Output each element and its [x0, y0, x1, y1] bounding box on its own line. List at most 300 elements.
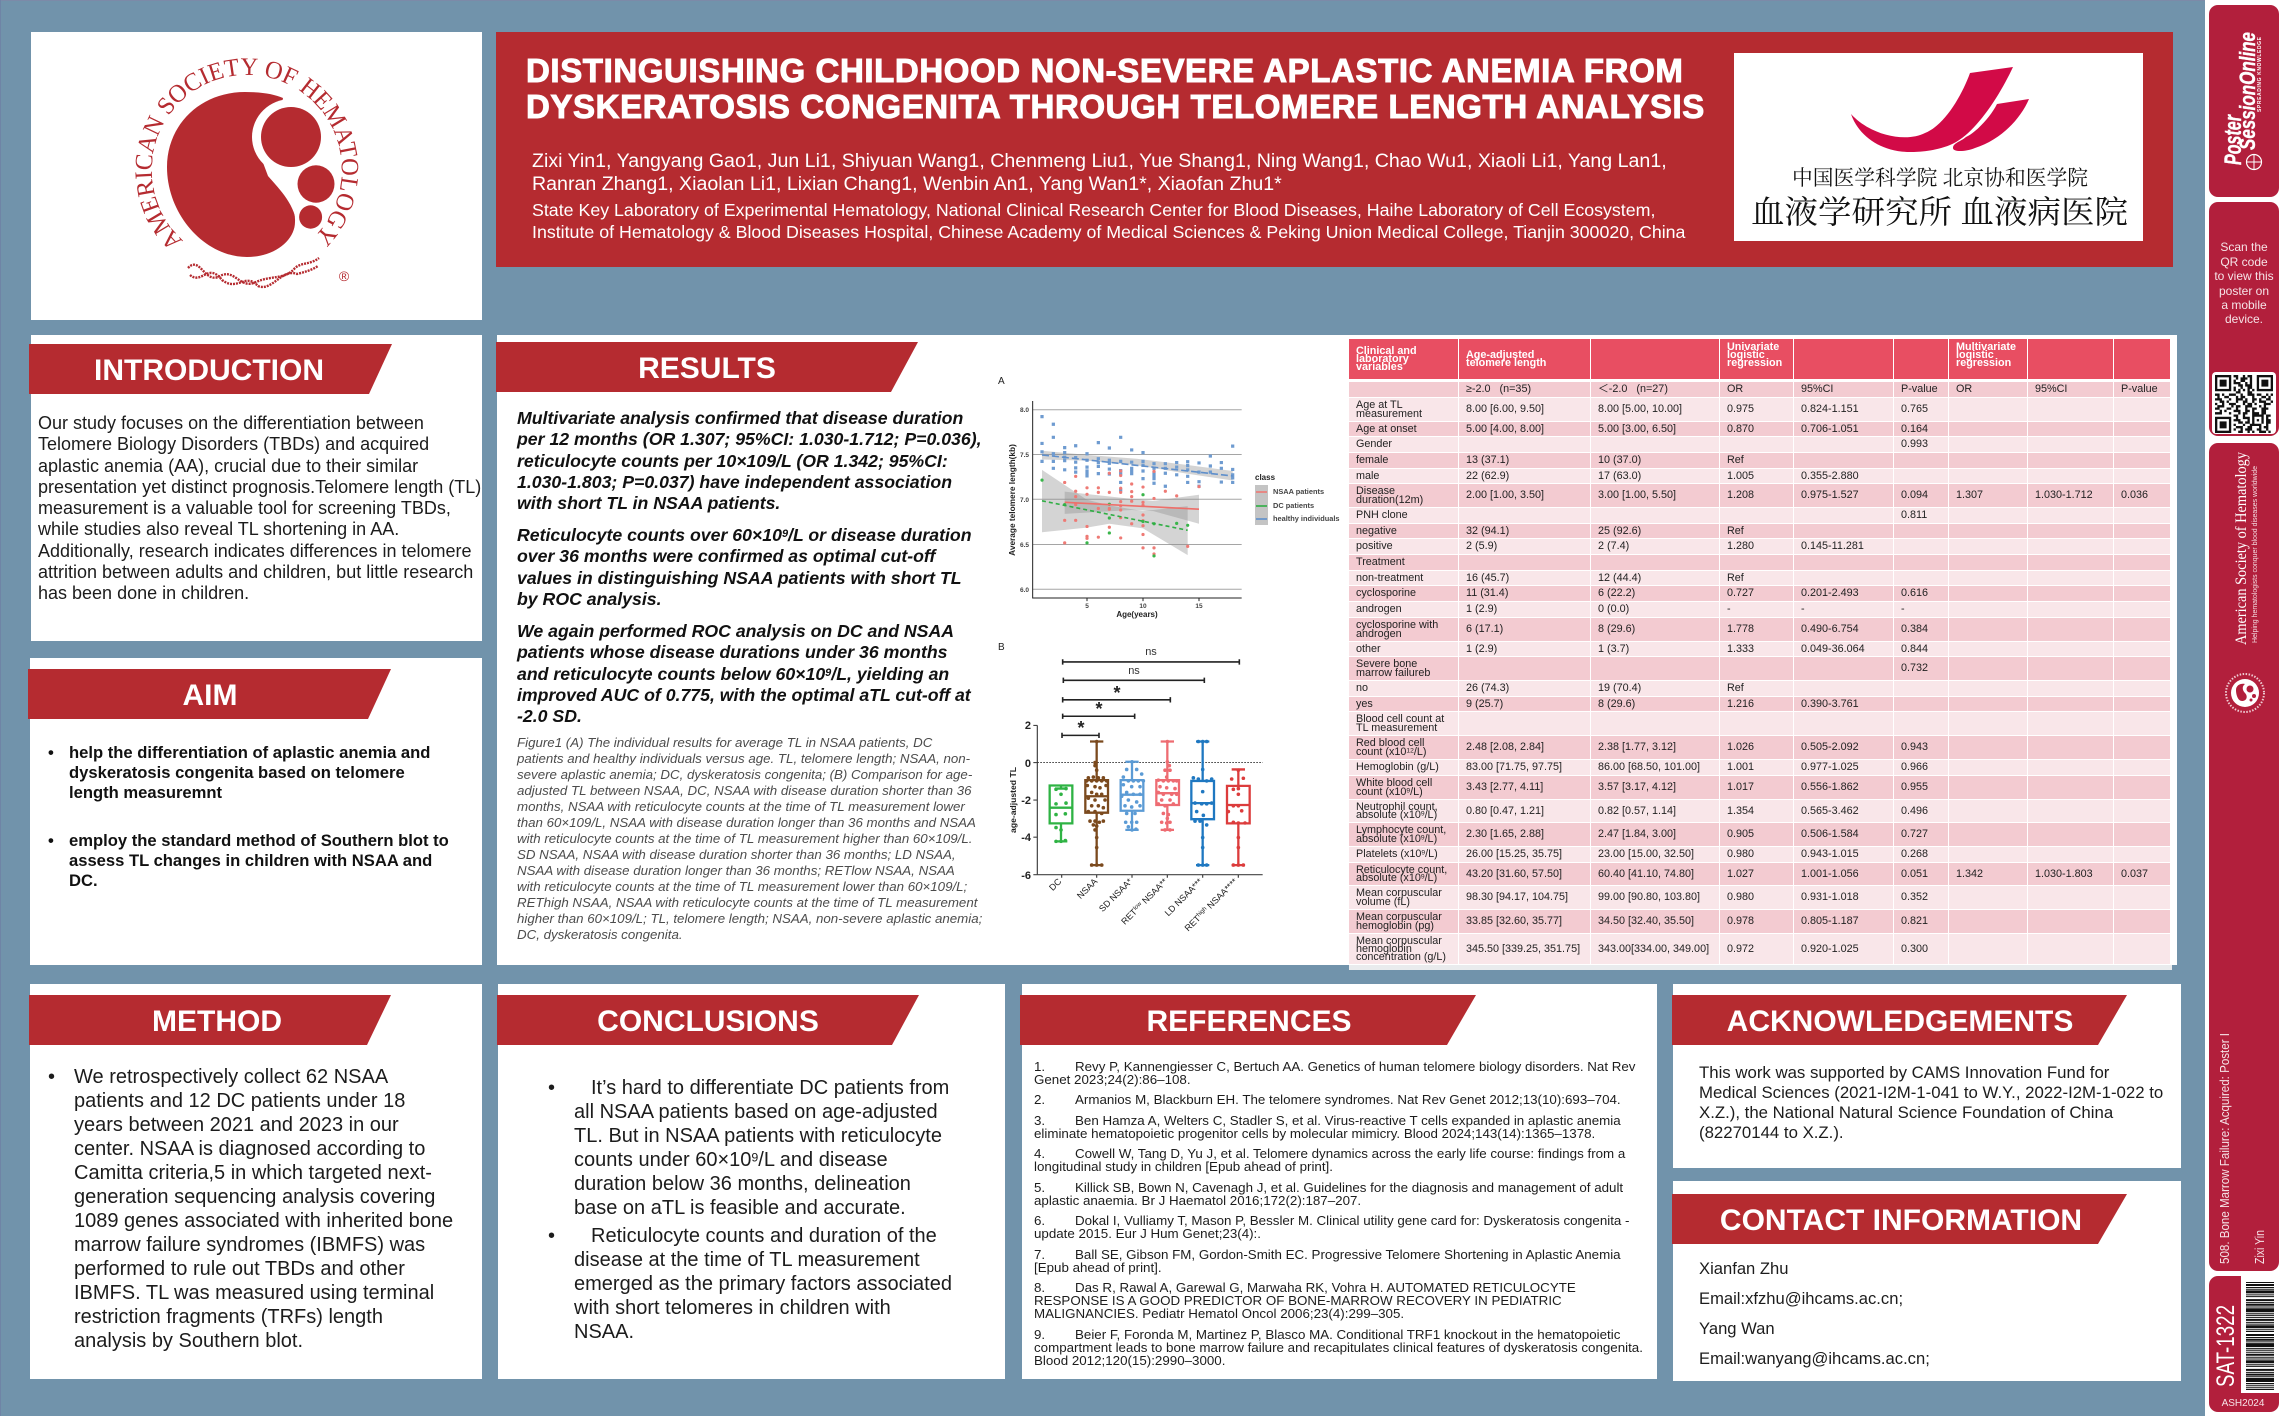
introduction text — [38, 413, 481, 603]
poster title: DYSKERATOSIS CONGENITA THROUGH TELOMERE LENGTH ANALYSIS — [526, 88, 1705, 125]
table: logistic regression: 6 (22.2) — [1598, 587, 1635, 599]
institution logo — [1734, 53, 2143, 241]
results finding 1: per 12 months (OR 1.307; 95%CI: 1.030-1.712; P=0.036), — [517, 429, 982, 449]
heading: contact information — [1672, 1194, 2127, 1244]
sidebar: QR code prompt: poster on — [2219, 284, 2269, 298]
table: logistic regression: 13 (37.1) — [1466, 454, 1509, 466]
table: logistic regression: 98.30 [94.17, 104.75] — [1466, 891, 1568, 903]
introduction text: Our study focuses on the differentiation between — [38, 413, 424, 433]
panel: aim — [30, 658, 482, 965]
conclusion bullet 1: TL. But in NSAA patients with reticulocyte — [574, 1125, 942, 1147]
heading: references: REFERENCES — [1146, 1005, 1352, 1038]
sidebar: poster number and barcode: ASH2024 — [2222, 1398, 2265, 1409]
sidebar: PosterSessionOnline logo: Poster — [2220, 114, 2247, 165]
table: logistic regression: 1.001-1.056 — [1801, 868, 1859, 880]
acknowledgements text: Medical Sciences (2021-I2M-1-041 to W.Y., 2022-I2M-1-022 to — [1699, 1083, 2163, 1102]
table: logistic regression: 1.354 — [1727, 805, 1754, 817]
table: logistic regression: P-value — [2121, 383, 2158, 395]
conclusion bullet 1 — [548, 1077, 949, 1219]
reference 7: Ball SE, Gibson FM, Gordon-Smith EC. Progressive Telomere Shortening in Aplastic Anemia — [1075, 1247, 1621, 1262]
table: logistic regression: 0.805-1.187 — [1801, 915, 1859, 927]
table: logistic regression: 2.30 [1.65, 2.88] — [1466, 828, 1544, 840]
table: logistic regression: 99.00 [90.80, 103.80] — [1598, 891, 1700, 903]
table: logistic regression: non-treatment — [1356, 572, 1423, 584]
table: logistic regression: 0.905 — [1727, 828, 1754, 840]
table: logistic regression: 32 (94.1) — [1466, 525, 1509, 537]
table: logistic regression: 1.005 — [1727, 470, 1754, 482]
contact text: Email:xfzhu@ihcams.ac.cn; — [1699, 1289, 1903, 1308]
chart A: telomere length versus age scatter — [998, 376, 1242, 619]
table: logistic regression: OR — [1956, 383, 1972, 395]
table: logistic regression: concentration (g/L) — [1356, 951, 1446, 963]
table: logistic regression: White blood cell — [1356, 777, 1432, 789]
table: logistic regression: Hemoglobin (g/L) — [1356, 761, 1439, 773]
method bullet text: years between 2021 and 2023 in our — [74, 1114, 399, 1136]
table: logistic regression: 1.342 — [1956, 868, 1983, 880]
heading: introduction — [29, 344, 392, 394]
sidebar: poster number and barcode: SAT-1322 — [2212, 1305, 2240, 1387]
aim bullet 2: assess TL changes in children with NSAA and — [69, 851, 432, 870]
chart B: age-adjusted TL box plot: LD NSAA*** — [1163, 876, 1205, 918]
reference 6: Dokal I, Vulliamy T, Mason P, Bessler M. Clinical utility gene card for: Dyskeratosis congenita - — [1075, 1213, 1629, 1228]
chart A: telomere length versus age scatter: Average telomere length(kb) — [1007, 444, 1017, 556]
panel: method — [30, 984, 482, 1379]
chart B: age-adjusted TL box plot: ns — [1145, 646, 1157, 658]
figure caption: severe aplastic anemia; DC, dyskeratosis congenita; (B) Comparison for age- — [517, 767, 972, 782]
table: logistic regression: 0.355-2.880 — [1801, 470, 1859, 482]
sidebar: society and session panel — [2209, 443, 2279, 1271]
sidebar: society and session panel: American Society of Hematology — [2233, 452, 2250, 645]
table: logistic regression: 8 (29.6) — [1598, 698, 1635, 710]
chart B: age-adjusted TL box plot: * — [1095, 699, 1103, 719]
method bullet text: analysis by Southern blot. — [74, 1330, 303, 1352]
table: logistic regression: 0.980 — [1727, 848, 1754, 860]
results finding 2: values in distinguishing NSAA patients with short TL — [517, 568, 962, 588]
method bullet text: 1089 genes associated with inherited bone — [74, 1210, 453, 1232]
table: logistic regression: 0.036 — [2121, 489, 2148, 501]
table: logistic regression: 25 (92.6) — [1598, 525, 1641, 537]
heading: acknowledgements — [1672, 995, 2127, 1045]
table: logistic regression: 12 (44.4) — [1598, 572, 1641, 584]
method bullet text — [48, 1066, 453, 1352]
table: logistic regression: 0.980 — [1727, 891, 1754, 903]
table: logistic regression: count (x1012/L) — [1356, 746, 1426, 758]
table: logistic regression: 0.920-1.025 — [1801, 943, 1859, 955]
conclusion bullet 2 — [548, 1225, 952, 1343]
chart A legend — [1255, 473, 1340, 525]
table: logistic regression: 345.50 [339.25, 351.75] — [1466, 943, 1580, 955]
table: logistic regression: 43.20 [31.60, 57.50] — [1466, 868, 1562, 880]
figure caption: adjusted TL between NSAA, DC, NSAA with disease duration shorter than 36 — [517, 783, 972, 798]
table: logistic regression: 0.565-3.462 — [1801, 805, 1859, 817]
table: logistic regression: 26.00 [15.25, 35.75] — [1466, 848, 1562, 860]
sidebar: society and session panel: Zixi Yin — [2252, 1230, 2267, 1264]
chart B: age-adjusted TL box plot: NSAA — [1075, 876, 1099, 901]
table: logistic regression: 2 (7.4) — [1598, 540, 1629, 552]
conclusion bullet 1: counts under 60×109/L and disease — [574, 1149, 888, 1171]
heading: aim: AIM — [182, 679, 238, 712]
table: logistic regression: 1.333 — [1727, 643, 1754, 655]
authors: Ranran Zhang1, Xiaolan Li1, Lixian Chang1, Wenbin An1, Yang Wan1*, Xiaofan Zhu1* — [532, 173, 1282, 195]
affiliations: Institute of Hematology & Blood Diseases Hospital, Chinese Academy of Medical Sciences & Peking Union Medical College, Tianjin 300020, China — [532, 222, 1685, 242]
results finding 1 — [516, 408, 982, 513]
figure caption: DC, dyskeratosis congenita. — [517, 927, 683, 942]
table: logistic regression: cyclosporine — [1356, 587, 1416, 599]
table: logistic regression: 1.208 — [1727, 489, 1754, 501]
table: logistic regression: - — [1727, 603, 1731, 615]
table: logistic regression: Neutrophil count, — [1356, 801, 1438, 813]
table: logistic regression: Gender — [1356, 438, 1392, 450]
table: logistic regression: Ref — [1727, 454, 1744, 466]
table: logistic regression: - — [1801, 603, 1805, 615]
table: logistic regression: 1.778 — [1727, 623, 1754, 635]
table: logistic regression: ＜-2.0 (n=27) — [1598, 383, 1668, 395]
introduction text: Additionally, research indicates differences in telomere — [38, 541, 472, 561]
chart B: age-adjusted TL box plot: NSAA** — [1138, 876, 1170, 907]
table: logistic regression: Age at onset — [1356, 423, 1417, 435]
table: logistic regression: 2.48 [2.08, 2.84] — [1466, 741, 1544, 753]
panel: contact information — [1673, 1181, 2181, 1381]
reference 3 — [1034, 1113, 1621, 1141]
reference 3: 3. — [1034, 1113, 1045, 1128]
chart A: telomere length versus age scatter: Age(years) — [1116, 610, 1158, 619]
institution logo: 中国医学科学院 北京协和医学院 — [1792, 162, 2088, 192]
chart A: telomere length versus age scatter: 7.5 — [1020, 452, 1029, 459]
heading: method: METHOD — [152, 1005, 282, 1038]
figure caption: SD NSAA, NSAA with disease duration shorter than 36 months; LD NSAA, — [517, 847, 956, 862]
reference 7 — [1034, 1247, 1621, 1275]
table: logistic regression: 0.977-1.025 — [1801, 761, 1859, 773]
heading: results — [496, 342, 918, 392]
conclusion bullet 2: emerged as the primary factors associated — [574, 1273, 952, 1295]
table: logistic regression: 1.216 — [1727, 698, 1754, 710]
table: logistic regression: 3.43 [2.77, 4.11] — [1466, 781, 1543, 793]
table: logistic regression: female — [1356, 454, 1388, 466]
method bullet text: performed to rule out TBDs and other — [74, 1258, 405, 1280]
table: logistic regression: positive — [1356, 540, 1393, 552]
table: logistic regression: other — [1356, 643, 1381, 655]
table: logistic regression: Clinical and — [1356, 345, 1417, 357]
table: logistic regression: 0.975 — [1727, 403, 1754, 415]
table: logistic regression: 0.975-1.527 — [1801, 489, 1859, 501]
table: logistic regression: 17 (63.0) — [1598, 470, 1641, 482]
table: logistic regression: 0.145-11.281 — [1801, 540, 1864, 552]
table: logistic regression: androgen — [1356, 603, 1402, 615]
table: logistic regression: absolute (x109/L) — [1356, 872, 1437, 884]
reference 7: [Epub ahead of print]. — [1034, 1260, 1162, 1275]
chart B: age-adjusted TL box plot: age-adjusted TL — [1008, 767, 1018, 833]
reference 8: RESPONSE IS A GOOD PREDICTOR OF BONE-MARROW RECOVERY IN PEDIATRIC — [1034, 1293, 1562, 1308]
contact text: Email:wanyang@ihcams.ac.cn; — [1699, 1349, 1930, 1368]
table: logistic regression: 1 (2.9) — [1466, 603, 1497, 615]
table: logistic regression: logistic — [1956, 349, 1994, 361]
table: logistic regression: volume (fL) — [1356, 896, 1410, 908]
table: logistic regression: Ref — [1727, 525, 1744, 537]
table: logistic regression: 0.978 — [1727, 915, 1754, 927]
chart B: age-adjusted TL box plot: -4 — [1021, 832, 1032, 844]
table: logistic regression: 1.017 — [1727, 781, 1754, 793]
table: logistic regression: 0.727 — [1727, 587, 1754, 599]
introduction text: presentation yet distinct prognosis.Telomere length (TL) — [38, 477, 481, 497]
table: logistic regression: marrow failureb — [1356, 666, 1430, 678]
chart B: age-adjusted TL box plot: 0 — [1025, 758, 1031, 770]
figure caption: than 60×109/L, NSAA with disease duration longer than 36 months and NSAA — [517, 815, 976, 830]
table: logistic regression: 5.00 [3.00, 6.50] — [1598, 423, 1676, 435]
table: logistic regression: count (x109/L) — [1356, 786, 1423, 798]
sidebar: QR code prompt: to view this — [2214, 269, 2274, 283]
heading: contact information: CONTACT INFORMATION — [1720, 1204, 2082, 1237]
sidebar: QR code prompt: a mobile — [2221, 298, 2267, 312]
table: logistic regression: 2 (5.9) — [1466, 540, 1497, 552]
chart B: age-adjusted TL box plot: * — [1113, 683, 1121, 703]
table: logistic regression: 0.727 — [1901, 828, 1928, 840]
table: logistic regression: logistic — [1727, 349, 1765, 361]
sidebar: poster number and barcode — [2209, 1276, 2279, 1412]
table: logistic regression: 1.280 — [1727, 540, 1754, 552]
chart B: age-adjusted TL box plot: high — [1196, 906, 1208, 918]
results finding 3: -2.0 SD. — [517, 706, 582, 726]
table: logistic regression: 0.506-1.584 — [1801, 828, 1859, 840]
chart A: telomere length versus age scatter: 6.0 — [1020, 587, 1029, 594]
table: logistic regression: 1.307 — [1956, 489, 1983, 501]
reference 4: 4. — [1034, 1146, 1045, 1161]
affiliations: State Key Laboratory of Experimental Hematology, National Clinical Research Center for Blood Diseases, Haihe Laboratory of Cell Ecosystem, — [532, 200, 1655, 220]
table: logistic regression: ≥-2.0 (n=35) — [1466, 383, 1531, 395]
reference 6: 6. — [1034, 1213, 1045, 1228]
aim bullet 2: DC. — [69, 871, 98, 890]
chart A: telomere length versus age scatter: 6.5 — [1020, 542, 1029, 549]
reference 2: Armanios M, Blackburn EH. The telomere syndromes. Nat Rev Genet 2012;13(10):693–704. — [1075, 1092, 1621, 1107]
table: logistic regression: 0.384 — [1901, 623, 1928, 635]
acknowledgements text: (82270144 to X.Z.). — [1699, 1123, 1844, 1142]
table: logistic regression: hemoglobin (pg) — [1356, 920, 1434, 932]
method bullet text: • — [48, 1066, 55, 1088]
introduction text: attrition between adults and children, but little research — [38, 562, 473, 582]
results finding 3: We again performed ROC analysis on DC and NSAA — [517, 621, 954, 641]
table: logistic regression: 0.82 [0.57, 1.14] — [1598, 805, 1676, 817]
table: logistic regression: 0.505-2.092 — [1801, 741, 1859, 753]
aim bullet 2: • — [48, 831, 54, 850]
heading: results: RESULTS — [638, 352, 776, 385]
table: logistic regression: 6 (17.1) — [1466, 623, 1503, 635]
results finding 1: Multivariate analysis confirmed that disease duration — [517, 408, 963, 428]
reference 8: MALIGNANCIES. Pediatr Hematol Oncol 2006;23(4):299–305. — [1034, 1306, 1404, 1321]
table: logistic regression: 0.943-1.015 — [1801, 848, 1859, 860]
table: logistic regression: Reticulocyte count, — [1356, 864, 1447, 876]
reference 2: 2. — [1034, 1092, 1045, 1107]
table: logistic regression: 0.955 — [1901, 781, 1928, 793]
reference 1 — [1034, 1059, 1636, 1087]
chart A: telomere length versus age scatter: 15 — [1195, 603, 1203, 610]
panel letter B: B — [998, 642, 1005, 653]
table: logistic regression: duration(12m) — [1356, 494, 1423, 506]
table: logistic regression: 23.00 [15.00, 32.50] — [1598, 848, 1694, 860]
method bullet text: patients and 12 DC patients under 18 — [74, 1090, 405, 1112]
authors — [532, 150, 1667, 195]
table: logistic regression: 0.870 — [1727, 423, 1754, 435]
table: logistic regression: 0.844 — [1901, 643, 1928, 655]
institution logo: 血液学研究所 血液病医院 — [1751, 187, 2128, 233]
table: logistic regression: 33.85 [32.60, 35.77] — [1466, 915, 1562, 927]
results finding 3: patients whose disease durations under 36 months — [517, 642, 948, 662]
table: logistic regression: hemoglobin — [1356, 943, 1412, 955]
figure caption: NSAA with disease duration longer than 36 months; RETlow NSAA, NSAA — [517, 863, 955, 878]
table: logistic regression: regression — [1956, 357, 2011, 369]
aim bullet 1: length measuremnt — [69, 783, 222, 802]
logo DNA chain — [188, 258, 319, 287]
results finding 2: Reticulocyte counts over 60×109/L or disease duration — [517, 525, 972, 545]
conclusion bullet 1: It’s hard to differentiate DC patients from — [591, 1077, 949, 1099]
poster title: DISTINGUISHING CHILDHOOD NON-SEVERE APLASTIC ANEMIA FROM — [526, 52, 1683, 89]
table: logistic regression: 0.931-1.018 — [1801, 891, 1859, 903]
chart B: age-adjusted TL box plot: SD NSAA* — [1097, 876, 1135, 914]
aim bullet 1 — [48, 743, 430, 802]
results finding 1: with short TL in NSAA patients. — [517, 493, 780, 513]
table: logistic regression: 95%CI — [2035, 383, 2067, 395]
table: logistic regression: absolute (x109/L) — [1356, 809, 1437, 821]
heading: conclusions: CONCLUSIONS — [597, 1005, 819, 1038]
introduction text: while studies also reveal TL shortening in AA. — [38, 519, 399, 539]
table: logistic regression: 0.094 — [1901, 489, 1928, 501]
table: logistic regression: 11 (31.4) — [1466, 587, 1508, 599]
sidebar: society and session panel: 508. Bone Marrow Failure: Acquired: Poster I — [2217, 1033, 2232, 1264]
conclusion bullet 2: Reticulocyte counts and duration of the — [591, 1225, 937, 1247]
table: logistic regression: cyclosporine with — [1356, 619, 1438, 631]
chart B: age-adjusted TL box plot: RET — [1183, 913, 1202, 933]
chart B: age-adjusted TL box plot: * — [1077, 718, 1085, 738]
table: logistic regression: 1 (2.9) — [1466, 643, 1497, 655]
table: logistic regression: absolute (x109/L) — [1356, 832, 1437, 844]
conclusion bullet 1: duration below 36 months, delineation — [574, 1173, 911, 1195]
table: logistic regression: Mean corpuscular — [1356, 911, 1442, 923]
reference 9: Blood 2012;120(15):2990–3000. — [1034, 1353, 1225, 1368]
sidebar: PosterSessionOnline logo: SessionOnline — [2235, 32, 2260, 150]
results finding 3: and reticulocyte counts below 60×109/L, yielding an — [517, 664, 949, 684]
table: logistic regression: 0.821 — [1901, 915, 1928, 927]
figure caption: patients and healthy individuals versus age. TL, telomere length; NSAA, non- — [517, 751, 970, 766]
icon: QR code — [2215, 376, 2273, 432]
acknowledgements text: X.Z.), the National Natural Science Foundation of China — [1699, 1103, 2113, 1122]
results finding 2: by ROC analysis. — [517, 589, 662, 609]
table: logistic regression: Treatment — [1356, 556, 1405, 568]
chart A legend: healthy individuals — [1273, 514, 1340, 523]
figure: charts A and B — [998, 376, 1340, 933]
table: logistic regression: 0 (0.0) — [1598, 603, 1629, 615]
conclusion bullet 1: all NSAA patients based on age-adjusted — [574, 1101, 938, 1123]
table: logistic regression: 0.732 — [1901, 662, 1928, 674]
table: logistic regression: negative — [1356, 525, 1397, 537]
table: logistic regression: Univariate — [1727, 341, 1779, 353]
table: logistic regression: measurement — [1356, 408, 1422, 420]
reference 4: longitudinal study in children [Epub ahead of print]. — [1034, 1159, 1333, 1174]
table: logistic regression: 2.47 [1.84, 3.00] — [1598, 828, 1676, 840]
table: logistic regression: 16 (45.7) — [1466, 572, 1509, 584]
table: logistic regression: 2.38 [1.77, 3.12] — [1598, 741, 1676, 753]
affiliations — [532, 200, 1686, 242]
table: logistic regression: 26 (74.3) — [1466, 682, 1509, 694]
figure caption: with reticulocyte counts at the time of TL measurement higher than 60×109/L. — [517, 831, 972, 846]
table: logistic regression: 0.706-1.051 — [1801, 423, 1859, 435]
table: logistic regression: Mean corpuscular — [1356, 935, 1442, 947]
logo ring text: AMERICAN SOCIETY OF HEMATOLOGY — [135, 58, 358, 248]
panel: title banner — [496, 32, 2173, 267]
table: logistic regression: 0.616 — [1901, 587, 1928, 599]
method bullet text: Camitta criteria,5 in which targeted next- — [74, 1162, 432, 1184]
table: logistic regression: Blood cell count at — [1356, 713, 1444, 725]
table: logistic regression: 9 (25.7) — [1466, 698, 1503, 710]
table: logistic regression: no — [1356, 682, 1368, 694]
introduction text: measurement is a valuable tool for screening TBDs, — [38, 498, 451, 518]
table: logistic regression: Platelets (x109/L) — [1356, 848, 1438, 860]
contact text: Xianfan Zhu — [1699, 1259, 1788, 1278]
chart B: age-adjusted TL box plot: -6 — [1021, 870, 1031, 882]
aim bullet 1: • — [48, 743, 54, 762]
aim bullet 2: employ the standard method of Southern blot to — [69, 831, 449, 850]
table: logistic regression: 0.051 — [1901, 868, 1928, 880]
reference 9: 9. — [1034, 1327, 1045, 1342]
table: logistic regression: Ref — [1727, 572, 1744, 584]
heading: method — [29, 995, 391, 1045]
sidebar: QR code prompt: Scan the — [2220, 240, 2268, 254]
chart B: age-adjusted TL box plot: NSAA**** — [1203, 876, 1240, 912]
table: logistic regression: 0.490-6.754 — [1801, 623, 1859, 635]
reference 1: Genet 2023;24(2):86–108. — [1034, 1072, 1191, 1087]
table: logistic regression: Mean corpuscular — [1356, 887, 1442, 899]
conclusion bullet 2: • — [548, 1225, 555, 1247]
sidebar: PosterSessionOnline logo — [2209, 5, 2279, 197]
method bullet text: marrow failure syndromes (IBMFS) was — [74, 1234, 425, 1256]
chart B: age-adjusted TL box plot — [998, 642, 1263, 933]
table: logistic regression: Multivariate — [1956, 341, 2016, 353]
sidebar: society and session panel: Helping hematologists conquer blood diseases worldwide — [2252, 466, 2259, 643]
table: logistic regression: 0.390-3.761 — [1801, 698, 1859, 710]
sidebar: QR code prompt: device. — [2225, 312, 2263, 326]
table: logistic regression: Red blood cell — [1356, 737, 1424, 749]
table: logistic regression: 0.164 — [1901, 423, 1928, 435]
conclusion bullet 2: with short telomeres in children with — [574, 1297, 891, 1319]
chart B: age-adjusted TL box plot: ns — [1128, 665, 1140, 677]
authors: Zixi Yin1, Yangyang Gao1, Jun Li1, Shiyuan Wang1, Chenmeng Liu1, Yue Shang1, Ning Wang1, Chao Wu1, Xiaoli Li1, Yang Lan1, — [532, 150, 1667, 172]
table: logistic regression: androgen — [1356, 628, 1402, 640]
introduction text: aplastic anemia (AA), crucial due to their similar — [38, 456, 418, 476]
table: logistic regression: 0.811 — [1901, 509, 1927, 521]
introduction text: has been done in children. — [38, 583, 249, 603]
table: logistic regression: 22 (62.9) — [1466, 470, 1509, 482]
table: logistic regression: 1.001 — [1727, 761, 1754, 773]
sidebar: poster session strip — [2205, 0, 2283, 1416]
figure caption: with reticulocyte counts at the time of TL measurement lower than 60×109/L; — [517, 879, 967, 894]
results finding 3: improved AUC of 0.775, with the optimal aTL cut-off at — [517, 685, 971, 705]
table: logistic regression: 1.030-1.803 — [2035, 868, 2093, 880]
table: logistic regression: 86.00 [68.50, 101.00] — [1598, 761, 1700, 773]
reference 6: update 2015. Eur J Hum Genet;23(4):. — [1034, 1226, 1261, 1241]
table: logistic regression: 8 (29.6) — [1598, 623, 1635, 635]
table: logistic regression: 0.80 [0.47, 1.21] — [1466, 805, 1544, 817]
panel letter A: A — [998, 376, 1005, 387]
chart A: telomere length versus age scatter: 5 — [1085, 603, 1089, 610]
table: logistic regression: 0.972 — [1727, 943, 1754, 955]
table: logistic regression: male — [1356, 470, 1379, 482]
table: logistic regression: 0.201-2.493 — [1801, 587, 1859, 599]
table: logistic regression: 34.50 [32.40, 35.50] — [1598, 915, 1694, 927]
table: logistic regression: 0.496 — [1901, 805, 1928, 817]
contact text — [1699, 1259, 1930, 1368]
table: logistic regression: 343.00[334.00, 349.00] — [1598, 943, 1709, 955]
table: logistic regression: yes — [1356, 698, 1373, 710]
method bullet text: We retrospectively collect 62 NSAA — [74, 1066, 388, 1088]
table: logistic regression: variables — [1356, 361, 1403, 373]
reference 8 — [1034, 1280, 1576, 1321]
